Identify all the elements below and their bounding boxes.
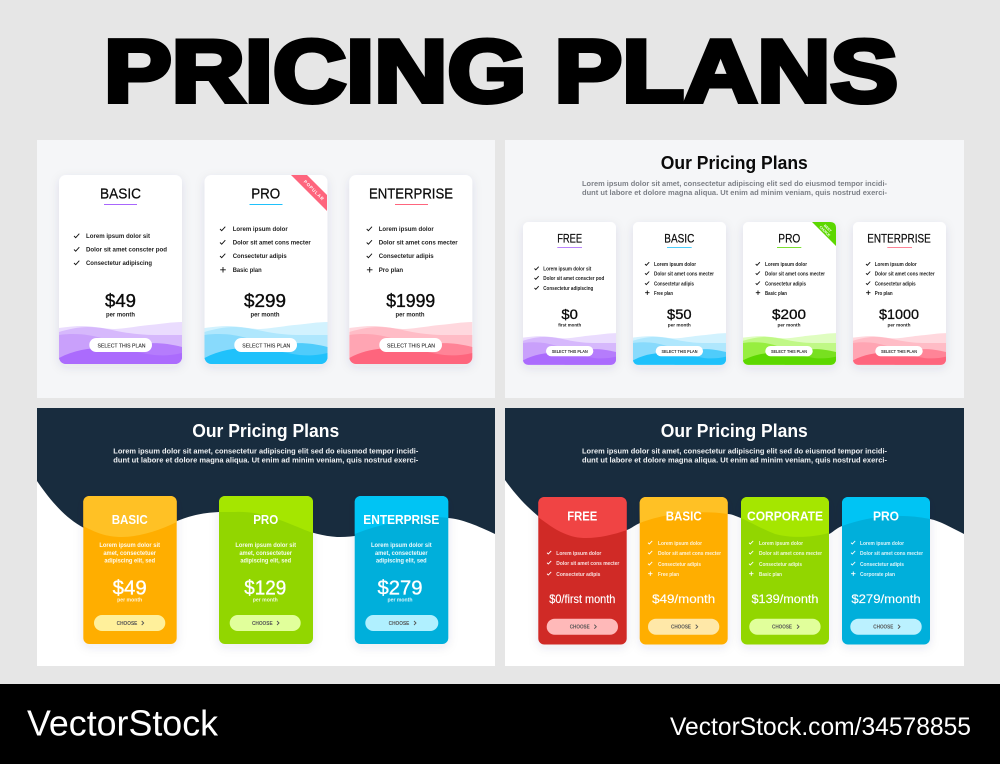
card: pro: Basic plan (765, 291, 787, 297)
card: basic: Free plan (658, 572, 679, 578)
intro text: dunt ut labore et dolore magna aliqua. Ut enim ad minim veniam, quis nostrud exerci- (113, 456, 419, 464)
card: pro: Consectetur adipis (233, 253, 287, 260)
card: pro: per month (253, 598, 278, 604)
intro text (582, 447, 887, 465)
card: free: FREE (557, 234, 582, 246)
panel: three light plans (37, 140, 495, 398)
intro text: Lorem ipsum dolor sit amet, consectetur adipiscing elit sed do eiusmod tempor incidi- (582, 447, 887, 456)
heading: Our Pricing Plans (661, 153, 808, 173)
card: corporate: Consectetur adipis (759, 562, 802, 568)
card: basic: Dolor sit amet cons mecter (654, 271, 714, 277)
card: corporate: Dolor sit amet cons mecter (759, 551, 822, 557)
card: enterprise: ENTERPRISE (369, 186, 453, 202)
panel: three dark-header plans (37, 408, 495, 666)
card: basic: Dolor sit amet cons mecter (658, 551, 721, 557)
card: enterprise: amet, consectetuer (375, 551, 428, 557)
card: pro: PRO (778, 234, 800, 246)
card: basic: BASIC (666, 510, 702, 524)
card: pro: per month (250, 312, 280, 318)
panel: four dark-header plans (505, 408, 964, 666)
card: pro: PRO (873, 510, 899, 524)
card: corporate: Lorem ipsum dolor (759, 541, 803, 547)
card: basic: amet, consectetuer (103, 551, 157, 557)
card: free: $0 (561, 307, 578, 322)
card: corporate: CORPORATE (747, 510, 823, 524)
card: free: FREE (567, 510, 597, 524)
card: pro: $299 (244, 291, 286, 311)
card: enterprise (853, 222, 946, 365)
ribbon: best choice: BEST (823, 224, 833, 234)
card: enterprise: SELECT THIS PLAN (387, 344, 435, 350)
card: corporate (741, 497, 829, 644)
card: pro (743, 222, 836, 365)
card: enterprise: per month (396, 312, 425, 318)
card: enterprise: CHOOSE (389, 621, 410, 627)
card: basic (639, 497, 728, 644)
card: enterprise: $1999 (386, 291, 435, 311)
card: free: SELECT THIS PLAN (552, 349, 588, 354)
heading: Our Pricing Plans (661, 421, 808, 441)
card: pro: Consectetur adipis (765, 281, 806, 287)
card: free: CHOOSE (570, 624, 590, 630)
card: free: Consectetur adipiscing (543, 286, 593, 292)
card: basic (633, 222, 726, 365)
card: pro (219, 496, 313, 644)
card: free: Consectetur adipis (556, 572, 600, 578)
card: enterprise: ENTERPRISE (867, 234, 931, 246)
card: pro: Dolor sit amet cons mecter (233, 240, 311, 246)
footer bar (0, 684, 1000, 764)
ribbon: best choice: CHOICE (819, 225, 831, 238)
card: enterprise: $1000 (879, 307, 919, 322)
card: enterprise: Dolor sit amet cons mecter (379, 240, 458, 246)
card: enterprise: per month (888, 322, 911, 328)
title: PRICING PLANS (104, 22, 898, 120)
card: enterprise: ENTERPRISE (363, 513, 439, 527)
card: enterprise: Lorem ipsum dolor (875, 262, 917, 268)
card: pro: Consectetur adipis (860, 562, 904, 568)
intro text: Lorem ipsum dolor sit amet, consectetur adipiscing elit sed do eiusmod tempor incidi- (113, 446, 419, 456)
card: enterprise: Lorem ipsum dolor (379, 226, 434, 233)
heading: Our Pricing Plans (192, 421, 339, 441)
card: basic: per month (117, 598, 142, 604)
card: pro: PRO (253, 513, 278, 527)
card: free: Dolor sit amet conscter pod (543, 276, 604, 282)
intro text (113, 446, 419, 464)
card: pro: Dolor sit amet cons mecter (765, 271, 825, 277)
card: pro: SELECT THIS PLAN (242, 344, 290, 350)
intro text: Lorem ipsum dolor sit amet, consectetur adipiscing elit sed do eiusmod tempor incidi- (582, 179, 887, 188)
intro text (582, 179, 887, 197)
card: pro: adipiscing elit, sed (240, 559, 291, 565)
card: basic: per month (106, 312, 135, 318)
card: basic: SELECT THIS PLAN (662, 349, 698, 354)
card: enterprise: Consectetur adipis (875, 281, 916, 287)
card: pro: $129 (244, 578, 286, 600)
card: pro: Lorem ipsum dolor (765, 262, 807, 268)
card: pro (842, 497, 930, 644)
card: basic: BASIC (100, 186, 141, 202)
card: basic: Lorem ipsum dolor (654, 262, 696, 268)
card: basic: Consectetur adipis (654, 281, 694, 287)
ribbon: popular: POPULAR (303, 179, 325, 202)
card: basic: Lorem ipsum dolor (658, 541, 702, 547)
card: basic: $49/month (652, 592, 715, 606)
card: pro: Dolor sit amet cons mecter (860, 551, 923, 557)
ribbon: best choice (812, 222, 836, 246)
card: basic: per month (668, 322, 691, 328)
intro text: dunt ut labore et dolore magna aliqua. Ut enim ad minim veniam, quis nostrud exerci- (582, 188, 887, 197)
card: pro: amet, consectetuer (239, 551, 293, 557)
card: free: Dolor sit amet cons mecter (556, 561, 619, 567)
card: pro: Corporate plan (860, 572, 895, 578)
card: pro: CHOOSE (252, 621, 273, 627)
card: basic: BASIC (112, 513, 148, 527)
card: enterprise: per month (388, 598, 412, 604)
card: basic: $49 (113, 578, 147, 600)
card: free: $0/first month (549, 592, 615, 606)
card: basic: Free plan (654, 291, 673, 297)
card: basic: Dolor sit amet conscter pod (86, 246, 167, 254)
card: enterprise: $279 (378, 578, 422, 600)
card: free: Lorem ipsum dolor sit (543, 266, 592, 272)
card: pro: CHOOSE (873, 624, 894, 630)
card: enterprise: SELECT THIS PLAN (881, 349, 917, 354)
card: enterprise: Pro plan (875, 291, 893, 297)
card: free: Lorem ipsum dolor (556, 551, 601, 557)
card: corporate: CHOOSE (772, 624, 792, 630)
card: enterprise: Pro plan (379, 267, 403, 274)
card: pro: $200 (772, 307, 806, 322)
card: basic: Lorem ipsum dolor sit (86, 233, 151, 240)
card: pro: $279/month (851, 592, 921, 606)
ribbon: popular (291, 175, 327, 211)
card: enterprise: Lorem ipsum dolor sit (371, 543, 432, 549)
intro text: dunt ut labore et dolore magna aliqua. Ut enim ad minim veniam, quis nostrud exerci- (582, 456, 887, 465)
card: pro: Lorem ipsum dolor (860, 541, 904, 547)
card: basic: $49 (105, 291, 136, 311)
card: basic: SELECT THIS PLAN (98, 344, 146, 350)
card: basic: Consectetur adipis (658, 562, 701, 568)
card: basic (83, 496, 177, 644)
card: pro (204, 175, 328, 364)
card: free (523, 222, 616, 365)
card: corporate: $139/month (752, 592, 818, 606)
card: free: first month (558, 322, 581, 328)
card: enterprise: Dolor sit amet cons mecter (875, 271, 935, 277)
card: basic: Lorem ipsum dolor sit (99, 543, 160, 549)
card: basic: CHOOSE (671, 624, 691, 630)
footer url: VectorStock.com/34578855 (670, 713, 971, 741)
card: enterprise (355, 496, 448, 644)
card: corporate: Basic plan (759, 572, 782, 578)
card: enterprise: Consectetur adipis (379, 253, 434, 260)
footer logo: VectorStock (27, 702, 219, 744)
card: basic: CHOOSE (117, 621, 138, 627)
card: pro: per month (778, 322, 801, 328)
card: basic: Consectetur adipiscing (86, 260, 152, 267)
card: pro: PRO (251, 186, 280, 202)
card: enterprise: adipiscing elit, sed (376, 559, 427, 565)
card: pro: Lorem ipsum dolor (233, 226, 288, 233)
card: basic (59, 175, 182, 364)
card: pro: Basic plan (233, 267, 262, 274)
card: pro: SELECT THIS PLAN (771, 349, 807, 354)
panel: four light plans (505, 140, 964, 398)
card: enterprise (349, 175, 472, 364)
card: basic: $50 (667, 307, 692, 322)
card: free (538, 497, 627, 644)
card: basic: adipiscing elit, sed (104, 559, 155, 565)
card: basic: BASIC (664, 234, 694, 246)
card: pro: Lorem ipsum dolor sit (235, 543, 296, 549)
